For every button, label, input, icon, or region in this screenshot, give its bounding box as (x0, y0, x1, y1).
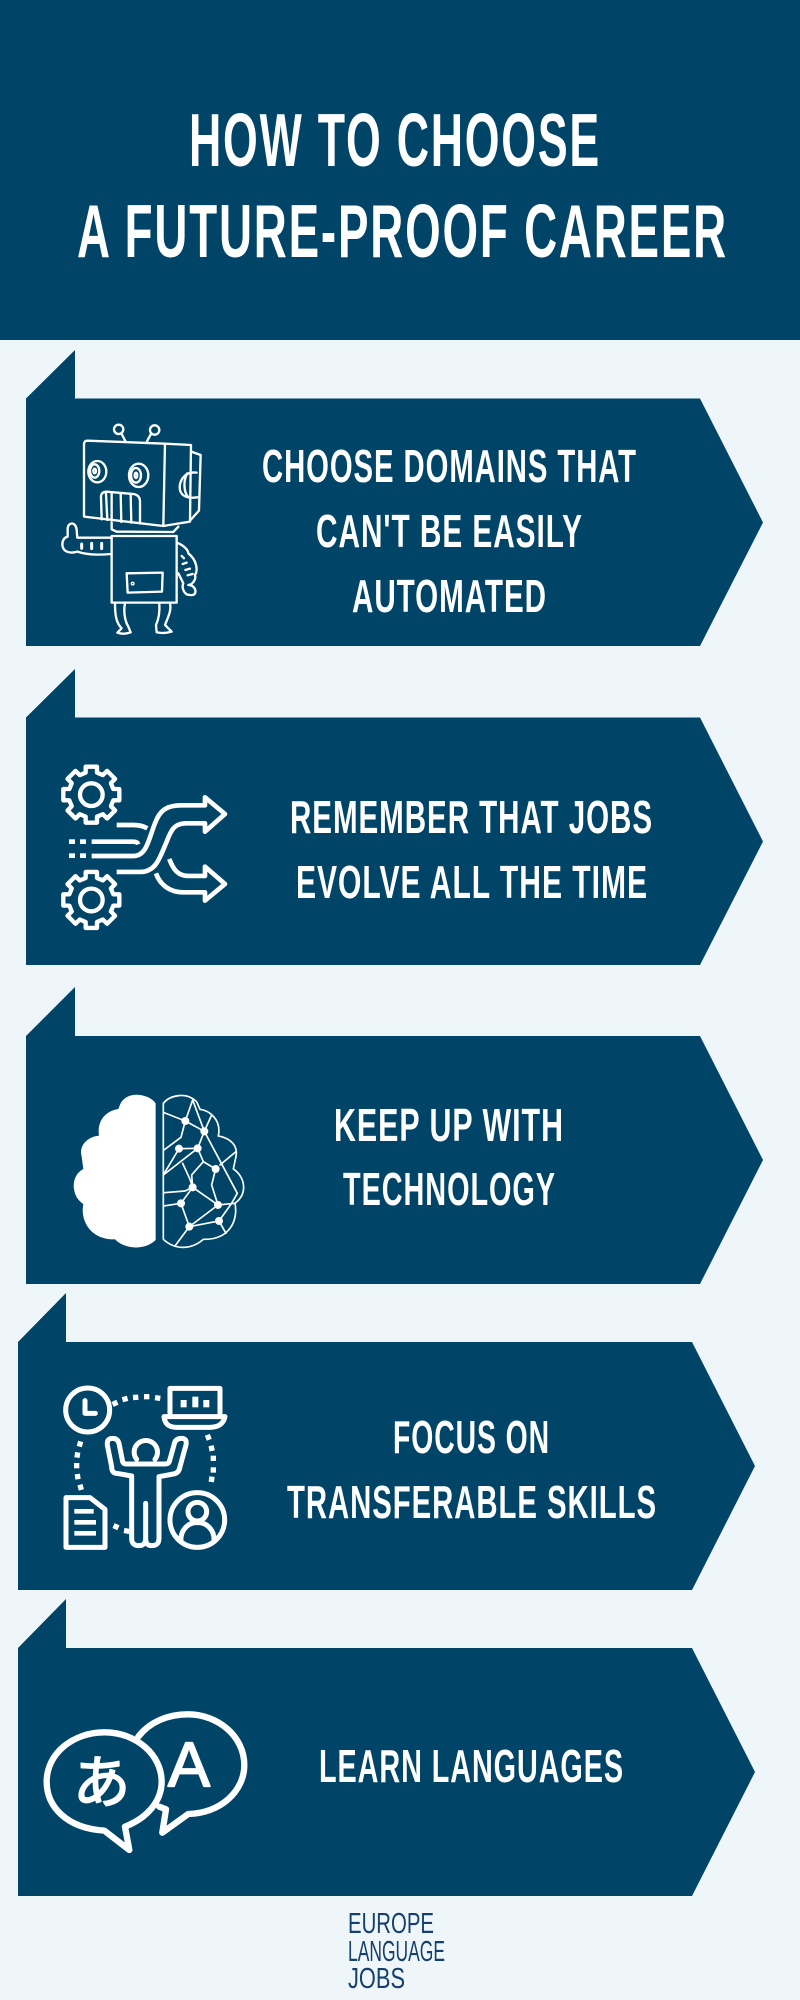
panel: choose domains (26, 350, 763, 646)
icon: gears and arrows (63, 767, 225, 928)
text: choose domains (262, 440, 637, 622)
icon: brain (74, 1095, 244, 1247)
text: choose domains: AUTOMATED (352, 570, 547, 622)
text: keep up with technology (334, 1099, 564, 1215)
text: learn languages: LEARN LANGUAGES (319, 1740, 624, 1792)
panel: jobs evolve (26, 669, 763, 965)
logo: Europe Language Jobs: JOBS (348, 1963, 405, 1995)
panel: keep up with technology (26, 987, 763, 1284)
icon: robot (62, 425, 201, 634)
logo: Europe Language Jobs: EUROPE (348, 1908, 434, 1940)
text: keep up with technology: TECHNOLOGY (343, 1163, 556, 1215)
text: transferable skills: FOCUS ON (393, 1411, 550, 1463)
text: keep up with technology: KEEP UP WITH (334, 1099, 564, 1151)
text: transferable skills (287, 1411, 657, 1528)
title (77, 98, 728, 273)
panel: transferable skills (18, 1293, 755, 1590)
text: jobs evolve (290, 791, 653, 908)
logo: Europe Language Jobs (348, 1908, 445, 1995)
header banner (0, 0, 800, 340)
icon: speech bubbles: あ (73, 1752, 130, 1816)
panel: learn languages (18, 1599, 755, 1896)
text: choose domains: CAN'T BE EASILY (316, 505, 583, 557)
icon: speech bubbles (47, 1714, 244, 1850)
icon: speech bubbles: A (168, 1730, 211, 1800)
icon: person with skills (66, 1388, 225, 1547)
logo: Europe Language Jobs: LANGUAGE (348, 1936, 445, 1968)
